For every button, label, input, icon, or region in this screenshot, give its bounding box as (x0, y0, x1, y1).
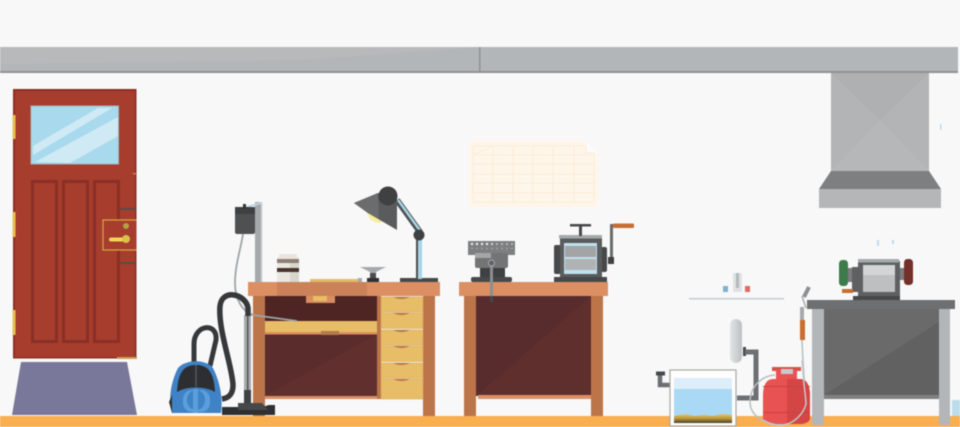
vacuum upright tube (222, 315, 275, 415)
ruler block (310, 278, 362, 282)
door panels (32, 182, 118, 342)
sink and taps (689, 273, 784, 300)
vacuum cleaner (169, 295, 275, 415)
small anvil (360, 267, 386, 282)
bench top (248, 282, 440, 296)
vacuum hose (220, 295, 248, 399)
bench legs (253, 296, 265, 416)
door hinges (12, 115, 16, 335)
soldering torch (800, 287, 809, 340)
jar (277, 254, 299, 282)
small drawer pull (306, 296, 335, 303)
drain trap and pipe (656, 319, 756, 398)
bench back panel (264, 296, 377, 396)
water tank (670, 370, 736, 426)
pull-out tray (265, 321, 377, 335)
door mat (12, 362, 137, 415)
door (12, 89, 137, 359)
grey workbench (807, 300, 955, 425)
vacuum body (169, 361, 222, 413)
decorative sparks (877, 124, 960, 416)
desk lamp (354, 186, 438, 282)
tools on left bench (235, 186, 438, 321)
floor (0, 416, 960, 427)
door window (31, 106, 118, 164)
extractor hood (819, 73, 941, 208)
workbench middle (459, 282, 608, 416)
workbench left (248, 282, 440, 416)
door lock plate and handle (103, 173, 136, 264)
bench lower rail (264, 396, 379, 399)
drawer column (377, 296, 423, 399)
flex shaft stand (235, 202, 297, 321)
bench vise (468, 241, 515, 302)
bench grinder (839, 259, 913, 300)
wall chart (469, 141, 598, 207)
gas cylinder (763, 360, 810, 425)
rolling mill (554, 224, 634, 282)
ceiling beam (0, 47, 958, 73)
gas hose (750, 340, 806, 425)
